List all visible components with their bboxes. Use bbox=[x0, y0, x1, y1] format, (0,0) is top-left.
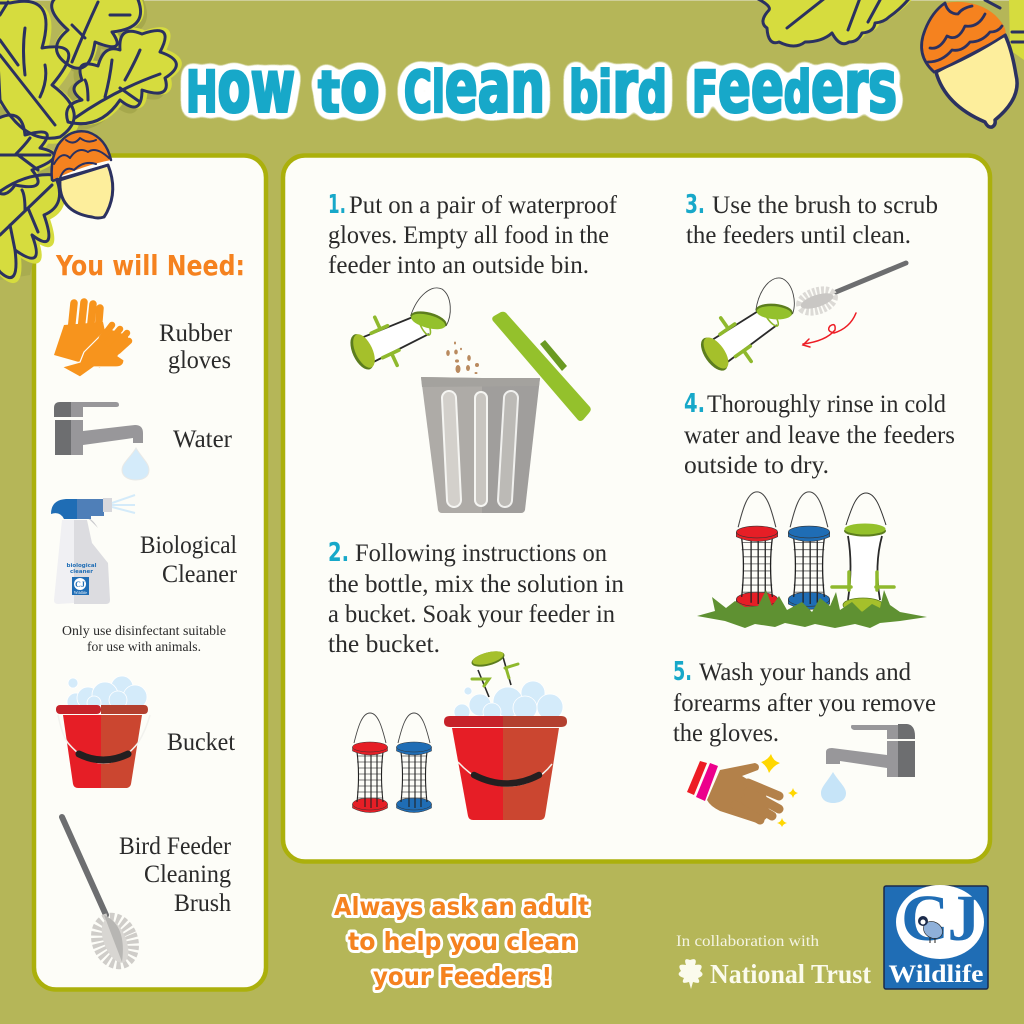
step 5 text: forearms after you remove bbox=[673, 690, 936, 717]
step 1 text bbox=[328, 190, 618, 279]
tap bbox=[826, 724, 915, 777]
callout: always ask an adult: Always ask an adult bbox=[334, 892, 589, 921]
title: Feeders bbox=[692, 44, 897, 130]
label: biological cleaner: Biological bbox=[140, 532, 237, 559]
icon: spray bottle: CJ bbox=[75, 580, 85, 589]
step 2 text: Following instructions on bbox=[355, 540, 607, 567]
bucket bbox=[444, 716, 567, 820]
icon: rubber gloves bbox=[54, 302, 130, 377]
illustration: scrubbing feeder bbox=[691, 263, 906, 382]
label: rubber gloves: Rubber bbox=[159, 320, 233, 347]
note: disinfectant bbox=[62, 623, 226, 654]
blue feeder bbox=[396, 713, 432, 812]
National Trust logo: National Trust bbox=[710, 959, 871, 989]
CJ Wildlife logo: J bbox=[948, 882, 980, 955]
acorn small bbox=[52, 131, 113, 218]
water drop bbox=[821, 772, 846, 803]
label: bird feeder cleaning brush: Bird Feeder bbox=[119, 833, 232, 860]
note: disinfectant: for use with animals. bbox=[87, 639, 201, 654]
icon: spray bottle: Wildlife bbox=[74, 590, 87, 595]
CJ Wildlife logo: C bbox=[901, 882, 949, 955]
icon: cleaning brush bbox=[62, 817, 138, 967]
icon: spray bottle: cleaner bbox=[70, 569, 93, 575]
title: bird bbox=[569, 44, 667, 130]
illustration: clean hand and tap bbox=[687, 724, 915, 827]
label: biological cleaner: Cleaner bbox=[162, 561, 238, 588]
green feeder soaking bbox=[470, 648, 518, 697]
red arrow bbox=[803, 313, 856, 347]
label: bucket: Bucket bbox=[167, 729, 235, 756]
step 4 text: Thoroughly rinse in cold bbox=[707, 391, 946, 418]
title: Clean bbox=[404, 44, 545, 130]
red feeder bbox=[736, 492, 778, 609]
blue feeder bbox=[788, 492, 830, 609]
bin bbox=[421, 377, 540, 513]
label: rubber gloves bbox=[159, 320, 233, 374]
step 2 text bbox=[328, 538, 625, 658]
grass bbox=[697, 590, 927, 628]
step 5 text: Wash your hands and bbox=[699, 659, 911, 686]
label: bird feeder cleaning brush bbox=[119, 833, 232, 917]
bin lid bbox=[492, 312, 591, 421]
step 2 text: a bucket. Soak your feeder in bbox=[328, 601, 615, 628]
panel: steps bbox=[283, 156, 990, 862]
label: rubber gloves: gloves bbox=[168, 347, 231, 374]
step 3 text: Use the brush to scrub bbox=[712, 192, 938, 219]
callout: always ask an adult bbox=[334, 892, 589, 991]
seeds bbox=[446, 342, 479, 374]
red feeder bbox=[352, 713, 388, 812]
label: biological cleaner bbox=[140, 532, 238, 588]
collaboration text: In collaboration with bbox=[676, 933, 819, 950]
acorn large bbox=[922, 2, 1017, 127]
step 2 text: the bottle, mix the solution in bbox=[328, 571, 625, 598]
step 4 text: 4. bbox=[684, 389, 705, 419]
step 5 text bbox=[673, 657, 936, 747]
step 5 text: the gloves. bbox=[673, 720, 779, 747]
bird bbox=[918, 916, 946, 943]
green feeder bbox=[832, 493, 894, 612]
icon: tap and drop bbox=[54, 402, 149, 480]
callout: always ask an adult: your Feeders! bbox=[373, 962, 552, 991]
illustration: feeders drying on grass bbox=[697, 492, 927, 628]
title bbox=[186, 44, 897, 130]
step 5 text: 5. bbox=[673, 657, 692, 687]
hand bbox=[687, 761, 779, 824]
oak leaf top right bbox=[750, 0, 1024, 60]
step 1 text: 1. bbox=[328, 190, 346, 220]
step 3 text: the feeders until clean. bbox=[686, 222, 911, 249]
step 2 text: the bucket. bbox=[328, 631, 440, 658]
icon: bucket bbox=[56, 676, 150, 788]
title: to bbox=[318, 44, 380, 130]
oak leaves top left bbox=[0, 0, 179, 281]
foam bbox=[454, 682, 562, 716]
heading: you will need: You will Need: bbox=[55, 249, 245, 282]
step 3 text bbox=[685, 190, 938, 249]
CJ Wildlife logo: Wildlife bbox=[888, 961, 984, 988]
icon: spray bottle bbox=[51, 495, 135, 604]
step 4 text: outside to dry. bbox=[684, 452, 829, 479]
label: bird feeder cleaning brush: Cleaning bbox=[144, 861, 231, 888]
step 1 text: Put on a pair of waterproof bbox=[349, 192, 618, 219]
icon: spray bottle: biological bbox=[67, 563, 97, 569]
brush bbox=[799, 263, 906, 312]
step 3 text: 3. bbox=[685, 190, 705, 220]
step 1 text: feeder into an outside bin. bbox=[328, 252, 589, 279]
CJ Wildlife logo bbox=[884, 882, 988, 989]
panel: you will need bbox=[34, 156, 266, 990]
sparkles bbox=[761, 754, 798, 827]
label: water: Water bbox=[173, 426, 233, 453]
illustration: feeder emptied into bin bbox=[342, 284, 591, 513]
step 1 text: gloves. Empty all food in the bbox=[328, 222, 609, 249]
step 4 text: water and leave the feeders bbox=[684, 422, 955, 449]
title: How bbox=[186, 44, 295, 130]
callout: always ask an adult: to help you clean bbox=[348, 927, 577, 956]
note: disinfectant: Only use disinfectant suitable bbox=[62, 623, 226, 638]
label: bird feeder cleaning brush: Brush bbox=[174, 890, 231, 917]
step 4 text bbox=[684, 389, 955, 479]
step 2 text: 2. bbox=[328, 538, 349, 568]
illustration: feeders and bucket bbox=[352, 648, 567, 820]
